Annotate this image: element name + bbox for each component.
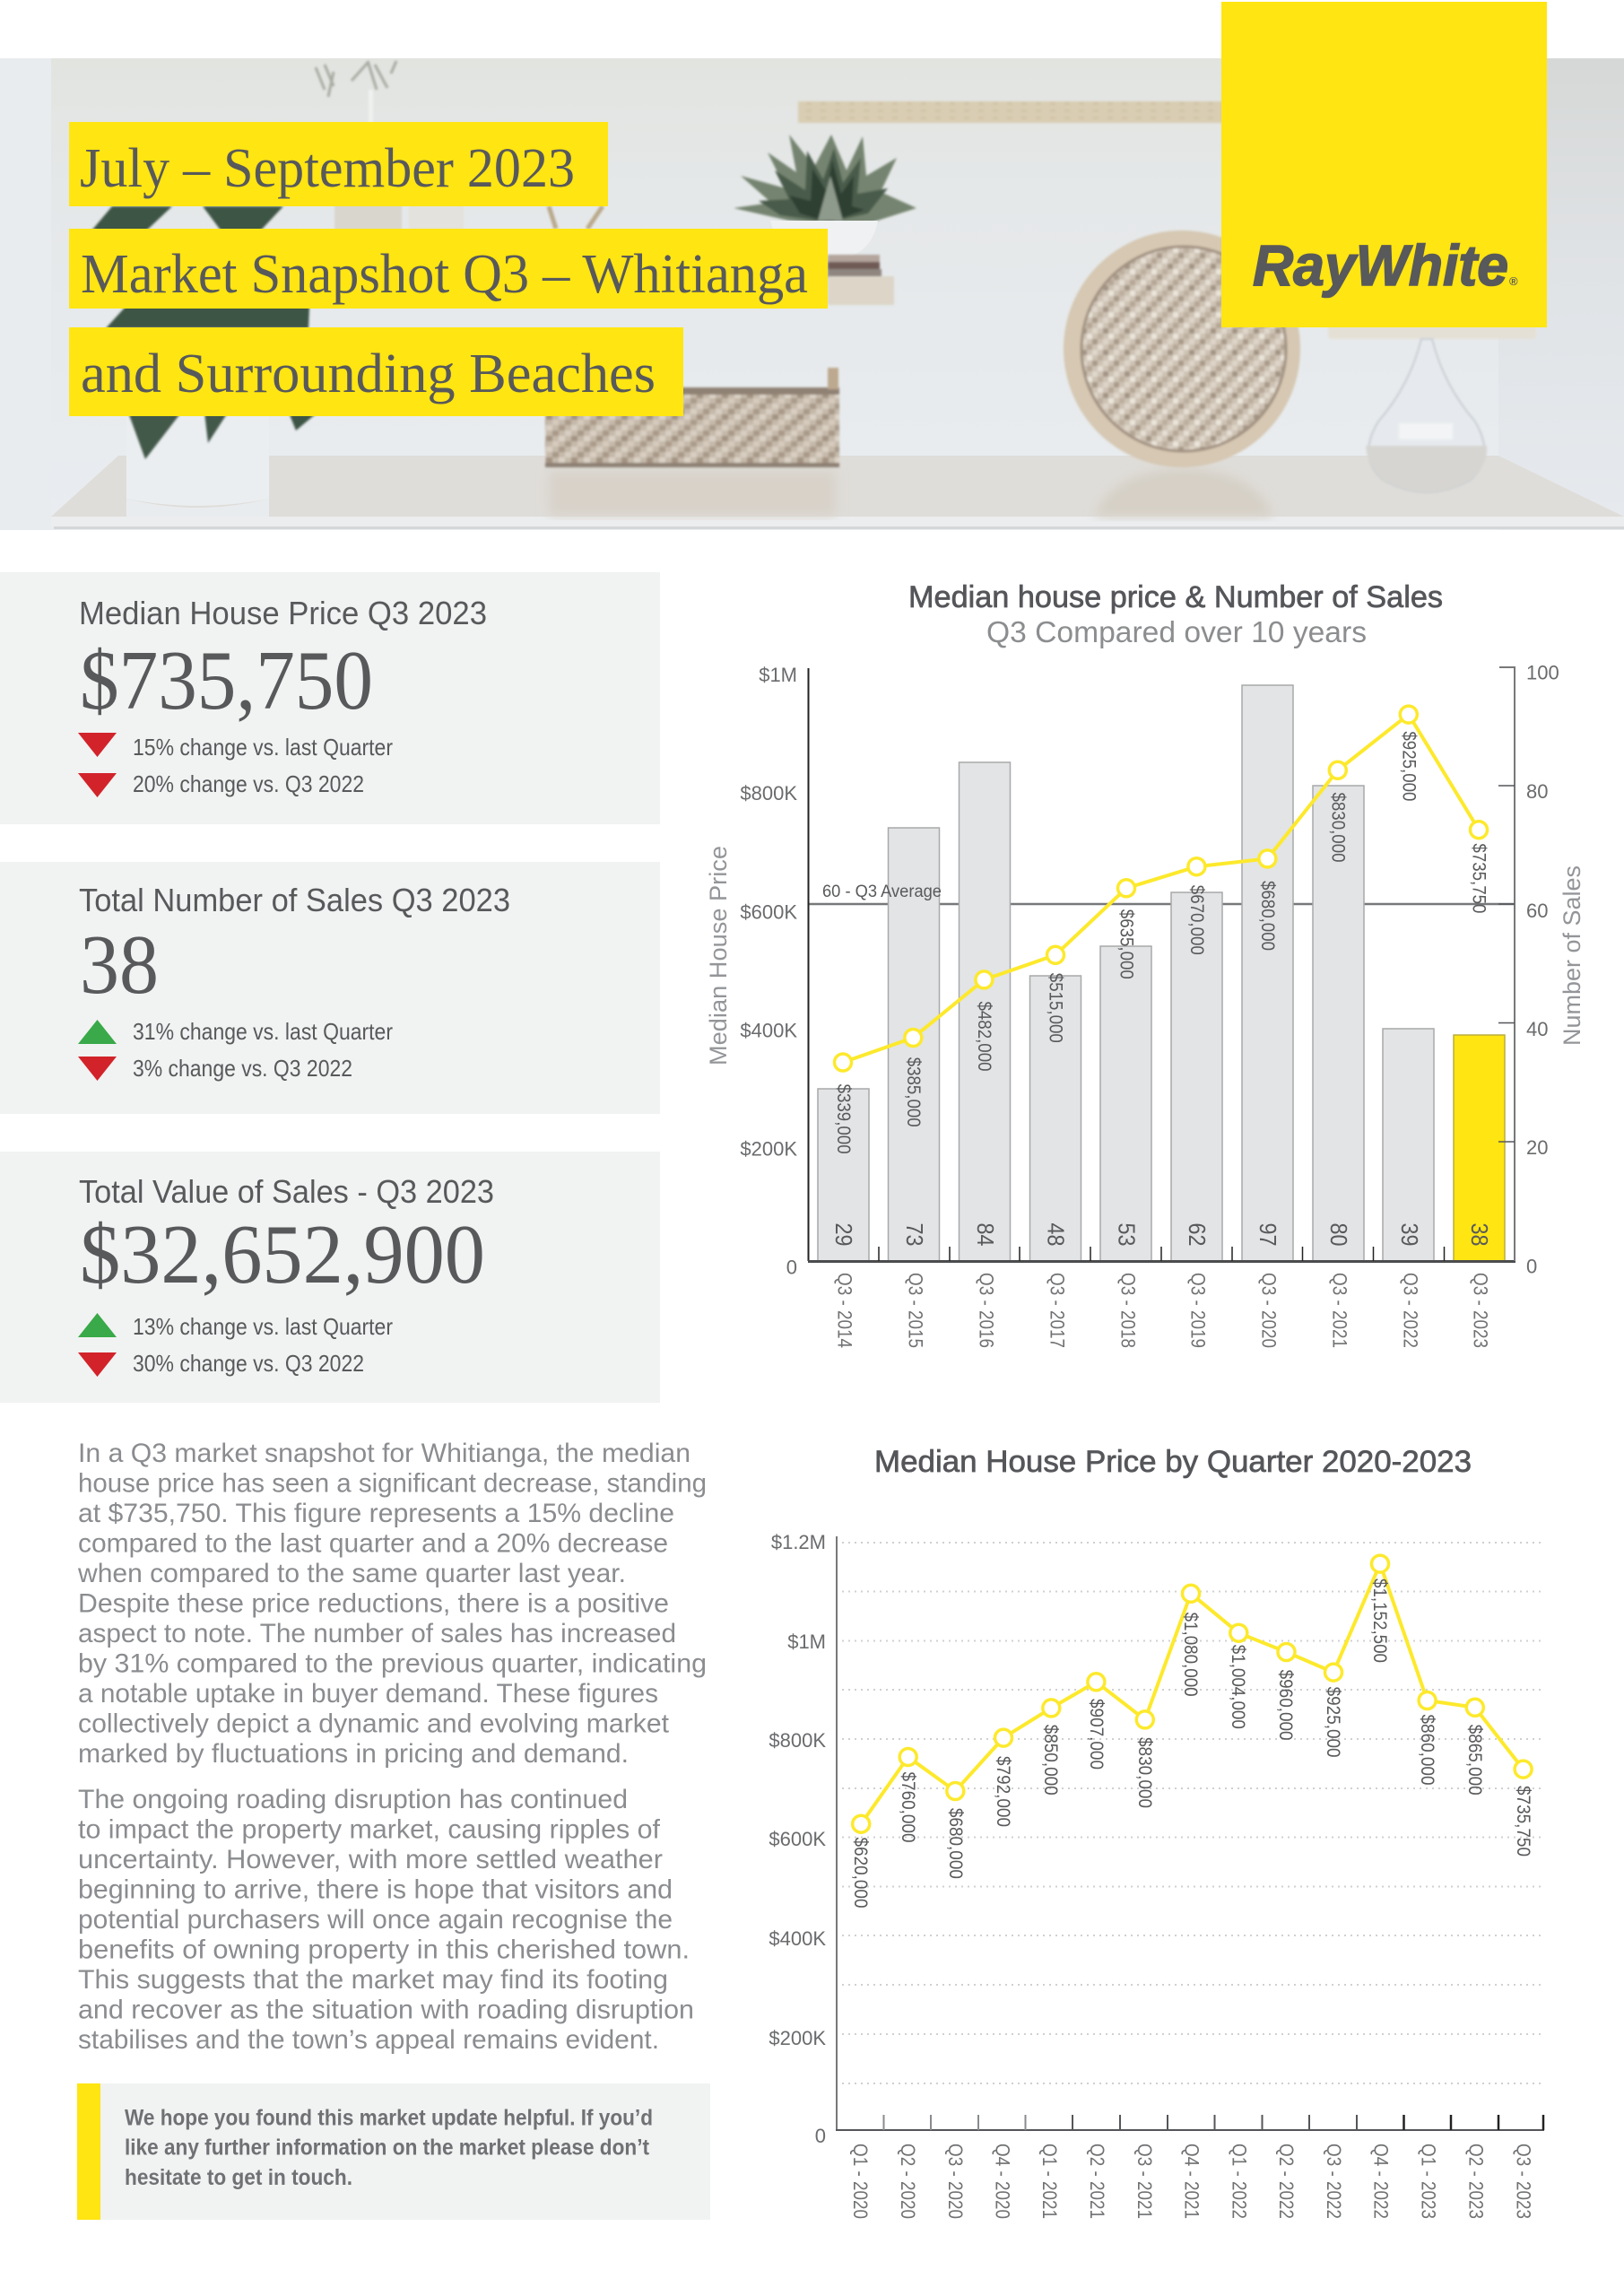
commentary paragraph 2: benefits of owning property in this cherished town. bbox=[78, 1935, 690, 1964]
panel: median house price bbox=[0, 572, 660, 824]
quarter labels: Q4 - 2020 bbox=[992, 2144, 1013, 2219]
price value labels bbox=[833, 731, 1489, 1154]
y axis labels: 0 bbox=[815, 2125, 826, 2147]
counter front edge bbox=[54, 526, 1624, 529]
icon: down triangle bbox=[78, 773, 117, 797]
sales count labels bbox=[830, 1223, 1493, 1247]
price value labels: $482,000 bbox=[974, 1001, 994, 1071]
quarter labels: Q4 - 2021 bbox=[1180, 2144, 1203, 2219]
title line 2: Market Snapshot Q3 – Whitianga bbox=[81, 244, 808, 305]
commentary paragraph 1: Despite these price reductions, there is a positive bbox=[78, 1589, 669, 1618]
quarter labels: Q3 - 2020 bbox=[944, 2144, 967, 2219]
right axis labels: 100 bbox=[1526, 662, 1559, 683]
commentary paragraph 1: aspect to note. The number of sales has increased bbox=[78, 1619, 676, 1648]
quarter labels: Q2 - 2020 bbox=[897, 2144, 919, 2219]
quarter labels: Q3 - 2023 bbox=[1469, 1273, 1492, 1348]
commentary paragraph 1: a notable uptake in buyer demand. These figures bbox=[78, 1679, 658, 1709]
quarter labels: Q3 - 2020 bbox=[1257, 1273, 1281, 1348]
commentary paragraph 2: potential purchasers will once again recognise the bbox=[78, 1905, 673, 1935]
price value labels: $1,004,000 bbox=[1228, 1645, 1248, 1729]
price value labels: $680,000 bbox=[1257, 881, 1278, 951]
commentary paragraph 1: collectively depict a dynamic and evolving market bbox=[78, 1709, 670, 1738]
price value labels: $865,000 bbox=[1464, 1725, 1485, 1796]
sales count labels: 73 bbox=[901, 1223, 928, 1247]
right axis labels: 80 bbox=[1526, 780, 1548, 803]
quarter labels: Q3 - 2021 bbox=[1133, 2144, 1156, 2219]
price value labels: $735,750 bbox=[1513, 1786, 1533, 1857]
axes bbox=[836, 1536, 1544, 2130]
panel: total number of sales bbox=[0, 862, 660, 1114]
quarter labels: Q3 - 2022 bbox=[1323, 2144, 1345, 2219]
leaves over pot bbox=[128, 413, 228, 459]
price value labels: $830,000 bbox=[1327, 793, 1349, 863]
quarter labels: Q3 - 2023 bbox=[1512, 2144, 1535, 2219]
quarter labels: Q3 - 2017 bbox=[1046, 1273, 1069, 1348]
icon: up triangle bbox=[78, 1020, 117, 1044]
price value labels: $1,152,500 bbox=[1369, 1578, 1390, 1663]
price value labels: $860,000 bbox=[1417, 1715, 1437, 1785]
commentary paragraph 2: and recover as the situation with roading disruption bbox=[78, 1995, 694, 2025]
price value labels: $907,000 bbox=[1086, 1699, 1107, 1770]
price line bbox=[853, 1555, 1532, 1832]
y axis labels bbox=[769, 1531, 826, 2147]
commentary paragraph 1: by 31% compared to the previous quarter, indicating bbox=[78, 1648, 707, 1679]
left axis labels: $600K bbox=[740, 900, 797, 924]
quarter labels: Q3 - 2016 bbox=[976, 1273, 997, 1348]
callout text: like any further information on the market please don’t bbox=[125, 2135, 650, 2160]
icon: down triangle bbox=[78, 1057, 117, 1081]
y axis labels: $400K bbox=[769, 1927, 826, 1950]
callout text: We hope you found this market update helpful. If you’d bbox=[125, 2106, 653, 2131]
sales count labels: 53 bbox=[1114, 1223, 1141, 1247]
quarter labels: Q1 - 2023 bbox=[1417, 2144, 1440, 2219]
sales count labels: 48 bbox=[1042, 1223, 1069, 1247]
price value labels: $925,000 bbox=[1399, 731, 1419, 801]
chart title: Median house price & Number of Sales bbox=[908, 580, 1443, 614]
commentary paragraph 1: compared to the last quarter and a 20% decrease bbox=[78, 1528, 668, 1559]
y axis labels: $600K bbox=[769, 1828, 826, 1850]
axes bbox=[808, 667, 1515, 1261]
dried grass bbox=[316, 61, 396, 97]
header photo bbox=[0, 58, 1624, 530]
chart subtitle: Q3 Compared over 10 years bbox=[986, 615, 1367, 648]
quarter labels: Q3 - 2019 bbox=[1187, 1273, 1209, 1348]
price value labels: $925,000 bbox=[1323, 1687, 1343, 1758]
quarter labels: Q2 - 2021 bbox=[1086, 2144, 1108, 2219]
left axis labels: $800K bbox=[740, 782, 797, 804]
commentary paragraph 1 bbox=[77, 1439, 707, 1769]
average line bbox=[808, 903, 1515, 905]
commentary paragraph 1: when compared to the same quarter last year. bbox=[77, 1559, 626, 1588]
commentary paragraph 1: In a Q3 market snapshot for Whitianga, the median bbox=[78, 1439, 690, 1468]
succulent plant bbox=[734, 135, 916, 224]
commentary paragraph 2: to impact the property market, causing ripples of bbox=[78, 1815, 661, 1844]
right axis labels bbox=[1526, 662, 1559, 1277]
sales count labels: 62 bbox=[1184, 1223, 1211, 1247]
left axis labels: 0 bbox=[786, 1256, 797, 1279]
change vs year: 20% change vs. Q3 2022 bbox=[133, 770, 364, 797]
right axis labels: 20 bbox=[1526, 1136, 1548, 1159]
value: 38 bbox=[80, 918, 159, 1012]
y axis labels: $800K bbox=[769, 1729, 826, 1752]
quarter labels: Q1 - 2021 bbox=[1038, 2144, 1061, 2219]
basket reflection bbox=[549, 471, 836, 516]
right axis labels: 40 bbox=[1526, 1018, 1548, 1040]
price value labels bbox=[850, 1578, 1533, 1909]
callout bbox=[77, 2083, 710, 2220]
commentary paragraph 2: beginning to arrive, there is hope that visitors and bbox=[78, 1874, 673, 1905]
commentary paragraph 1: house price has seen a significant decrease, standing bbox=[78, 1469, 707, 1498]
right wall bbox=[1547, 58, 1624, 217]
price value labels: $760,000 bbox=[898, 1772, 918, 1842]
pot body bbox=[126, 456, 269, 506]
price line bbox=[834, 706, 1487, 1071]
quarter labels: Q3 - 2015 bbox=[904, 1273, 927, 1348]
price value labels: $792,000 bbox=[993, 1756, 1013, 1827]
price value labels: $620,000 bbox=[850, 1837, 871, 1909]
leaves behind title bbox=[88, 206, 317, 430]
left axis labels: $200K bbox=[740, 1137, 797, 1161]
price value labels: $850,000 bbox=[1040, 1725, 1061, 1796]
price value labels: $960,000 bbox=[1275, 1670, 1296, 1741]
price value labels: $680,000 bbox=[945, 1808, 966, 1879]
title line 3 bbox=[69, 327, 683, 416]
icon: down triangle bbox=[78, 733, 117, 757]
y axis labels: $1M bbox=[787, 1631, 826, 1653]
bars: number of sales bbox=[818, 685, 1505, 1261]
value: $32,652,900 bbox=[80, 1208, 485, 1301]
round tray reflection bbox=[1094, 468, 1273, 517]
heading: Median House Price Q3 2023 bbox=[79, 595, 487, 631]
icon: up triangle bbox=[78, 1313, 117, 1337]
price value labels: $830,000 bbox=[1134, 1737, 1155, 1808]
sales count labels: 97 bbox=[1255, 1223, 1281, 1247]
price value labels: $339,000 bbox=[833, 1084, 854, 1154]
heading: Total Number of Sales Q3 2023 bbox=[79, 882, 510, 918]
average label: 60 - Q3 Average bbox=[822, 883, 942, 901]
heading: Total Value of Sales - Q3 2023 bbox=[79, 1173, 494, 1210]
change vs year: 30% change vs. Q3 2022 bbox=[133, 1350, 364, 1377]
price value labels: $635,000 bbox=[1116, 909, 1137, 979]
chart: median house price by quarter bbox=[769, 1445, 1544, 2219]
quarter labels: Q3 - 2021 bbox=[1329, 1273, 1350, 1348]
quarter labels: Q3 - 2014 bbox=[834, 1273, 855, 1348]
logo wordmark: ® bbox=[1509, 274, 1518, 288]
logo wordmark: RayWhite bbox=[1253, 233, 1508, 298]
left axis labels: $400K bbox=[740, 1019, 797, 1042]
sales count labels: 84 bbox=[972, 1223, 999, 1247]
quarter labels: Q1 - 2020 bbox=[849, 2144, 872, 2219]
change vs quarter: 31% change vs. last Quarter bbox=[133, 1018, 393, 1045]
commentary paragraph 2: This suggests that the market may find its footing bbox=[78, 1965, 668, 1995]
white pot bbox=[126, 499, 269, 517]
sales count labels: 38 bbox=[1466, 1223, 1493, 1247]
countertop bbox=[51, 456, 1624, 517]
quarter labels: Q2 - 2023 bbox=[1465, 2144, 1487, 2219]
price value labels: $670,000 bbox=[1186, 885, 1207, 955]
sales count labels: 80 bbox=[1325, 1223, 1352, 1247]
quarter labels: Q3 - 2022 bbox=[1399, 1273, 1422, 1348]
callout text: hesitate to get in touch. bbox=[125, 2165, 352, 2190]
callout text bbox=[125, 2106, 653, 2190]
price value labels: $1,080,000 bbox=[1180, 1613, 1201, 1697]
sales count labels: 39 bbox=[1396, 1223, 1423, 1247]
y axis labels: $1.2M bbox=[771, 1531, 826, 1553]
small shelf bbox=[828, 276, 894, 305]
title line 1 bbox=[69, 122, 608, 206]
commentary paragraph 2: stabilises and the town’s appeal remains evident. bbox=[78, 2025, 659, 2055]
commentary paragraph 1: at $735,750. This figure represents a 15% decline bbox=[78, 1499, 674, 1528]
quarter labels bbox=[849, 2144, 1535, 2219]
change vs quarter: 15% change vs. last Quarter bbox=[133, 734, 393, 761]
price value labels: $515,000 bbox=[1046, 973, 1065, 1043]
logo panel bbox=[1221, 2, 1547, 327]
left axis labels: $1M bbox=[759, 664, 797, 686]
white bowl bbox=[770, 221, 878, 254]
upper shelf bbox=[798, 101, 1229, 123]
commentary paragraph 2: uncertainty. However, with more settled weather bbox=[78, 1845, 663, 1874]
books bbox=[828, 255, 881, 278]
title line 1: July – September 2023 bbox=[80, 138, 575, 199]
right axis labels: 60 bbox=[1526, 900, 1548, 922]
commentary paragraph 2: The ongoing roading disruption has continued bbox=[78, 1785, 628, 1814]
quarter labels bbox=[834, 1273, 1492, 1348]
change vs year: 3% change vs. Q3 2022 bbox=[133, 1055, 352, 1082]
commentary paragraph 1: marked by fluctuations in pricing and demand. bbox=[78, 1739, 629, 1769]
quarter labels: Q3 - 2018 bbox=[1117, 1273, 1139, 1348]
background vases bbox=[334, 90, 603, 233]
change vs quarter: 13% change vs. last Quarter bbox=[133, 1313, 393, 1340]
lamp shade bbox=[1327, 327, 1536, 339]
icon: down triangle bbox=[78, 1352, 117, 1377]
right axis labels: 0 bbox=[1526, 1256, 1537, 1277]
price value labels: $385,000 bbox=[903, 1057, 924, 1127]
y axis labels: $200K bbox=[769, 2027, 826, 2049]
woven basket bbox=[545, 368, 839, 467]
quarter labels: Q2 - 2022 bbox=[1275, 2144, 1298, 2219]
left axis title: Median House Price bbox=[705, 846, 732, 1065]
value: $735,750 bbox=[80, 634, 373, 727]
quarter labels: Q4 - 2022 bbox=[1370, 2144, 1392, 2219]
round woven tray bbox=[1064, 230, 1300, 467]
glass lamp base bbox=[1366, 339, 1487, 492]
chart title: Median House Price by Quarter 2020-2023 bbox=[874, 1445, 1472, 1479]
sales count labels: 29 bbox=[830, 1223, 857, 1247]
price value labels: $735,750 bbox=[1469, 843, 1489, 913]
chart: median house price and number of sales bbox=[705, 580, 1585, 1348]
quarter labels: Q1 - 2022 bbox=[1229, 2144, 1250, 2219]
left axis labels bbox=[740, 664, 797, 1279]
right axis title: Number of Sales bbox=[1559, 865, 1585, 1046]
title line 3: and Surrounding Beaches bbox=[81, 344, 656, 404]
panel: total value of sales bbox=[0, 1152, 660, 1403]
commentary paragraph 2 bbox=[78, 1785, 694, 2055]
